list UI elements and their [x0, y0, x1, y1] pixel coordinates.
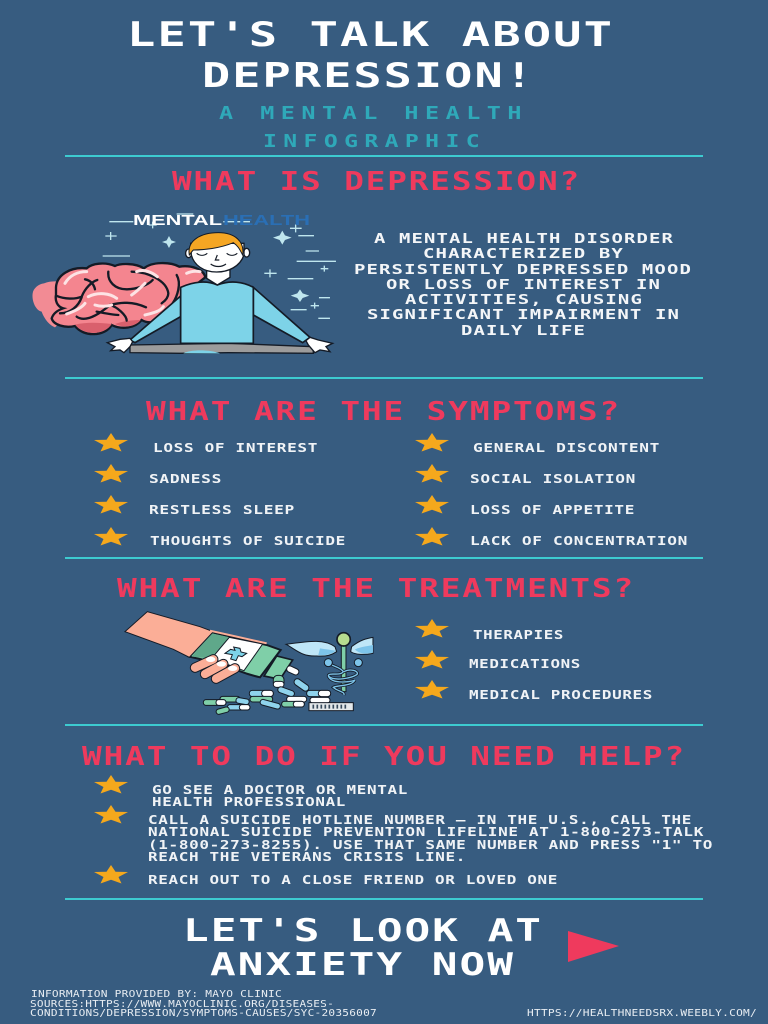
symptoms list: THOUGHTS OF SUICIDE [150, 534, 346, 548]
help list [94, 775, 713, 887]
subtitle [219, 103, 528, 152]
hand [125, 612, 213, 657]
illustration label: mental health: HEALTH [223, 212, 310, 229]
footer sources: CONDITIONS/DEPRESSION/SYMPTOMS-CAUSES/SYC-20356007 [30, 1008, 377, 1019]
heading: treatments: WHAT ARE THE TREATMENTS? [117, 574, 635, 604]
call to action [183, 913, 543, 983]
definition text: A MENTAL HEALTH DISORDER [374, 231, 674, 247]
definition text: CHARACTERIZED BY [423, 246, 624, 262]
subtitle: INFOGRAPHIC [263, 131, 486, 152]
help list: NATIONAL SUICIDE PREVENTION LIFELINE AT 1-800-273-TALK [148, 825, 704, 839]
subtitle: A MENTAL HEALTH [219, 103, 528, 124]
illustration: meditating man with brain [32, 214, 336, 353]
man [107, 233, 333, 353]
definition text: DAILY LIFE [461, 323, 586, 339]
definition text [354, 231, 692, 339]
caduceus [286, 633, 373, 695]
call to action: LET'S LOOK AT [183, 913, 543, 949]
symptoms list: LOSS OF INTEREST [153, 441, 318, 455]
footer sources [30, 989, 377, 1019]
help list: GO SEE A DOCTOR OR MENTAL [152, 783, 408, 797]
definition text: PERSISTENTLY DEPRESSED MOOD [354, 262, 692, 278]
footer sources: SOURCES:HTTPS://WWW.MAYOCLINIC.ORG/DISEASES- [30, 999, 334, 1010]
heading: what is depression: WHAT IS DEPRESSION? [172, 167, 581, 197]
treatments list: MEDICATIONS [469, 657, 581, 671]
symptoms list: GENERAL DISCONTENT [473, 441, 660, 455]
treatments list [415, 619, 653, 702]
symptoms list: SADNESS [149, 472, 222, 486]
symptoms list: SOCIAL ISOLATION [470, 472, 636, 486]
symptoms list: LACK OF CONCENTRATION [470, 534, 688, 548]
title: DEPRESSION! [202, 56, 535, 96]
definition text: SIGNIFICANT IMPAIRMENT IN [367, 307, 680, 323]
help list: REACH OUT TO A CLOSE FRIEND OR LOVED ONE [148, 873, 558, 887]
bottle [189, 632, 281, 677]
symptoms list: RESTLESS SLEEP [149, 503, 295, 517]
heading: what to do: WHAT TO DO IF YOU NEED HELP? [82, 742, 686, 772]
help list: HEALTH PROFESSIONAL [152, 795, 346, 809]
treatments list: MEDICAL PROCEDURES [469, 688, 653, 702]
illustration label: mental health: MENTAL [133, 212, 222, 229]
stars: symptoms [94, 433, 449, 546]
stars: treatments [415, 619, 449, 698]
symptoms list: LOSS OF APPETITE [470, 503, 635, 517]
help list: REACH THE VETERANS CRISIS LINE. [148, 850, 466, 864]
footer url: HTTPS://HEALTHNEEDSRX.WEEBLY.COM/ [527, 1008, 757, 1019]
heading: symptoms: WHAT ARE THE SYMPTOMS? [146, 397, 621, 427]
stars: help [94, 775, 128, 884]
illustration label: mental health [133, 212, 310, 229]
treatments list: THERAPIES [473, 628, 564, 642]
definition text: OR LOSS OF INTEREST IN [386, 277, 661, 293]
pill strip [309, 703, 353, 711]
symptoms list [94, 433, 688, 548]
footer sources: INFORMATION PROVIDED BY: MAYO CLINIC [31, 989, 282, 1000]
arrow [568, 931, 619, 962]
pills [203, 665, 331, 715]
fingers [195, 659, 235, 679]
title [127, 15, 614, 96]
sparkles and dashes [103, 214, 336, 318]
title: LET'S TALK ABOUT [127, 15, 614, 55]
brain [32, 263, 205, 334]
help list: (1-800-273-8255). USE THAT SAME NUMBER AND PRESS "1" TO [148, 838, 713, 852]
definition text: ACTIVITIES, CAUSING [405, 292, 643, 308]
call to action: ANXIETY NOW [210, 947, 515, 983]
illustration: pills and caduceus [125, 612, 373, 715]
help list: CALL A SUICIDE HOTLINE NUMBER – IN THE U.S., CALL THE [148, 813, 692, 827]
